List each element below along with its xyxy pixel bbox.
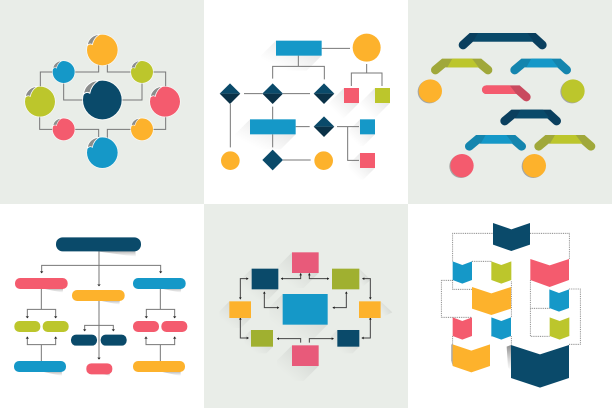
panel: chevron flow diagram [408,204,612,408]
tab: blue right [515,59,567,70]
chevron: top navy [493,223,530,251]
chevron: blue left [453,261,472,284]
node: top yellow circle [86,34,118,66]
connector lines and arrows [240,273,370,343]
node: left green circle [24,86,56,117]
box: blue pill [133,278,186,289]
box: green pill left [14,321,40,332]
box: lower green [251,330,273,347]
box: green pill right [43,321,69,332]
chevron: large navy [507,345,569,388]
decision: diamond 2 [262,83,283,104]
box: lower red pill [86,363,112,374]
tab: green left [435,59,488,70]
arrowheads [239,273,372,340]
panel: circular network diagram [0,0,204,204]
box: left yellow [229,301,251,318]
dashed connectors [441,233,580,345]
node: green circle right [560,79,585,103]
node: lower right yellow circle [314,151,333,170]
panel: rectangular cycle diagram [204,204,408,408]
node: bottom blue circle [86,137,118,169]
box: right yellow [359,301,381,318]
node: central navy circle [82,80,123,120]
node: small green circle [130,60,154,84]
box: top blue rectangle [276,41,322,56]
panel: curved tab hierarchy [408,0,612,204]
panel: pill hierarchy chart [0,204,204,408]
box: lower yellow pill [133,361,185,372]
decision: diamond 5 [262,150,283,170]
box: yellow pill [72,290,125,301]
box: navy pill left [71,335,97,346]
box: lower navy [337,330,359,347]
decision: diamond 3 [314,83,334,104]
box: red pill [15,278,68,289]
box: lower red square [360,153,375,168]
chevron: blue right [549,289,569,312]
box: navy pill right [101,335,127,346]
box: bottom pink [292,345,319,366]
chevron: red left [453,317,472,340]
node: red circle [449,154,474,178]
decision: diamond 1 [220,83,240,104]
node: small blue circle [52,60,75,84]
box: lower blue pill [14,361,66,372]
box: middle blue rectangle [250,119,296,134]
tab: top navy [463,33,542,45]
chevron: lower yellow [451,344,490,372]
box: top pink [292,252,319,273]
box: blue square [360,119,375,134]
decision: diamond 4 [314,116,334,137]
box: red pill right [161,321,187,332]
tab: lower blue [469,135,522,146]
node: lower left yellow circle [221,151,240,170]
long shadows [219,252,392,381]
chevron: green right [550,317,569,340]
chevron: yellow center [472,287,511,315]
node: yellow circle left [418,79,442,103]
chevron: red right [530,259,569,287]
arrowheads [26,271,176,360]
tab: lower green [539,135,591,146]
box: red pill left [133,321,159,332]
box: top navy pill [56,237,141,251]
curved shadows [33,249,182,376]
connector lines [27,251,175,361]
long shadows [235,41,390,180]
box: red square [344,88,359,103]
box: green square [375,88,390,103]
node: top yellow circle [353,34,381,62]
node: yellow circle lower [522,154,546,178]
node: right red circle [149,86,181,117]
node: small yellow circle [130,118,154,141]
connector lines [40,63,166,138]
tab: second navy [505,110,557,121]
box: upper navy [252,269,278,289]
box: central blue [283,294,328,325]
chevron: green [491,261,511,284]
node: small red circle [52,118,75,141]
chevron: blue center [491,317,511,340]
connector lines [230,48,382,160]
tab: red center [482,85,526,97]
box: upper green [332,269,359,289]
panel: decision flowchart [204,0,408,204]
